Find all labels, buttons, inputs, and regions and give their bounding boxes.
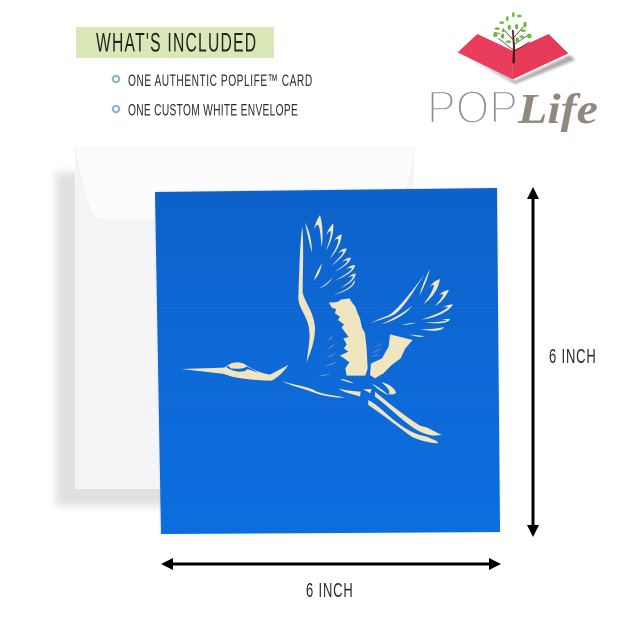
title: what's included: WHAT'S INCLUDED	[96, 27, 256, 58]
list: included items	[113, 70, 312, 119]
list item: envelope: ONE CUSTOM WHITE ENVELOPE	[128, 100, 298, 119]
envelope	[56, 148, 414, 506]
crane: right wing feathers	[370, 269, 453, 337]
logo wordmark: POP	[427, 81, 518, 133]
card	[155, 188, 500, 534]
crane: upper wing panel	[329, 298, 368, 376]
label: height 6 inch: 6 INCH	[549, 345, 596, 368]
crane: lower wing panel	[370, 334, 413, 378]
crane: head and neck	[182, 362, 345, 398]
list item: card: ONE AUTHENTIC POPLIFE™ CARD	[128, 70, 312, 90]
label: width 6 inch: 6 INCH	[306, 579, 353, 602]
logo wordmark	[427, 81, 598, 133]
crane: small feather cuts	[317, 336, 383, 376]
arrow: vertical 6 inch dimension	[527, 187, 539, 537]
logo wordmark: Life	[517, 87, 598, 133]
crane: tail and legs	[338, 379, 442, 443]
logo: poplife	[427, 12, 598, 133]
logo icon: open book with tree	[458, 12, 575, 84]
arrow: horizontal 6 inch dimension	[161, 558, 501, 570]
crane: upper wing feathers	[298, 215, 356, 362]
crane cut-out illustration	[182, 215, 453, 443]
